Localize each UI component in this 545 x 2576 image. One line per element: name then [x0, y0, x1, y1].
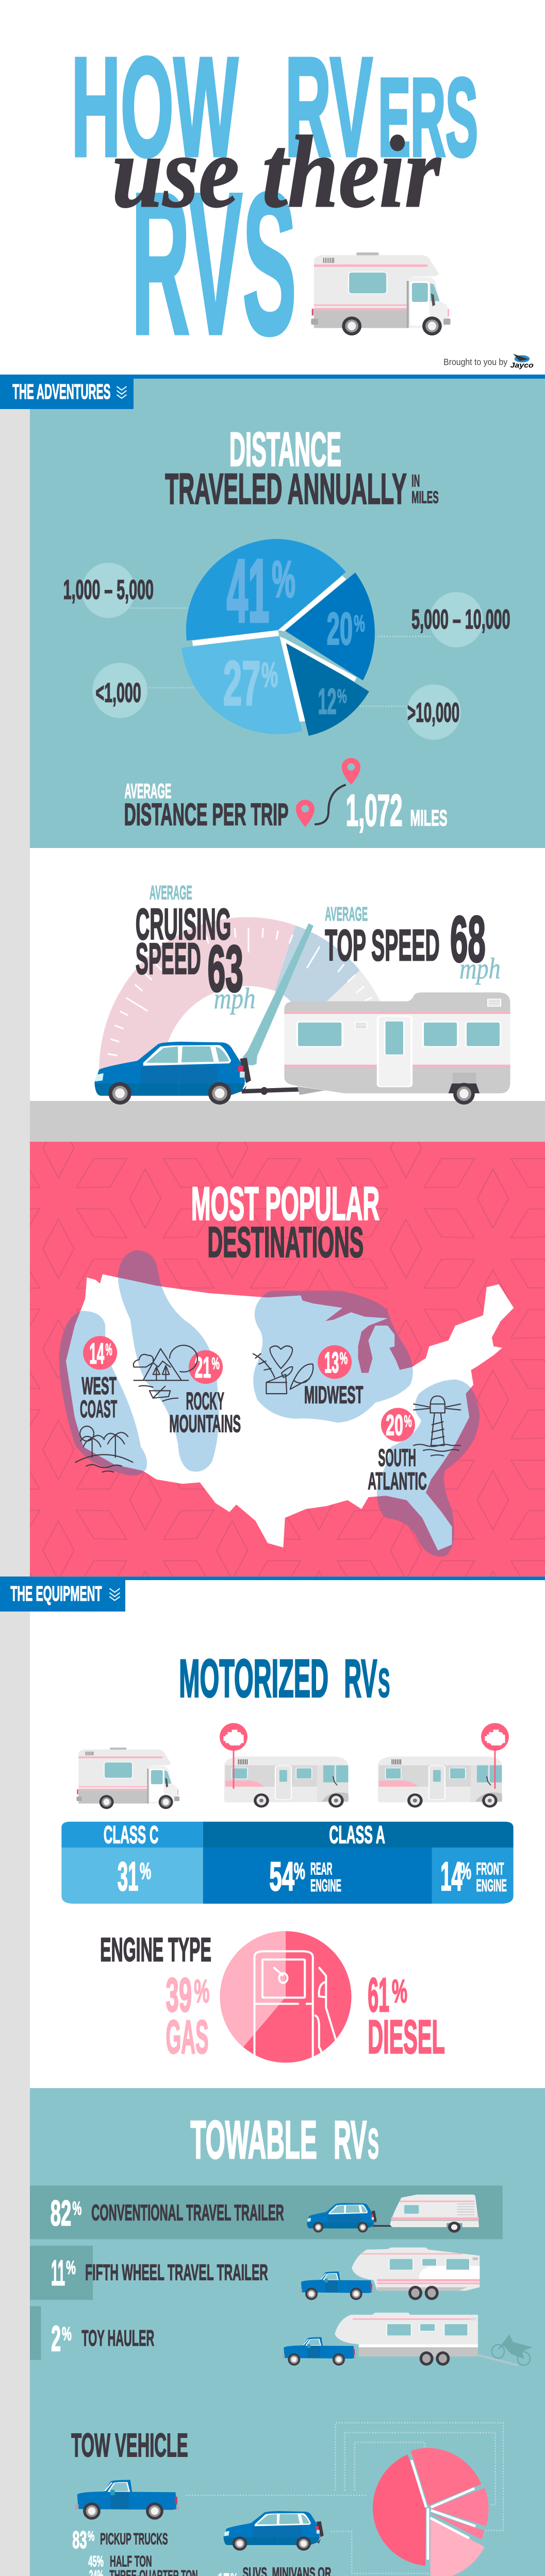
- panel: destinations: MIDWEST: [304, 1381, 364, 1409]
- region: south atlantic: SOUTH: [378, 1445, 416, 1472]
- region: rocky mountains: [134, 1345, 241, 1438]
- panel: speed: SPEED: [136, 934, 201, 983]
- stat: average distance per trip: AVERAGE: [124, 779, 171, 803]
- panel: speed: [94, 882, 510, 1105]
- pie chart: distance: %: [354, 610, 365, 636]
- section tab: adventures: [0, 375, 134, 409]
- panel: speed: mph: [214, 982, 255, 1014]
- pie chart: distance: 12: [318, 681, 337, 722]
- text: top speed: AVERAGE: [325, 903, 368, 925]
- bar row: conventional travel trailer: 82: [51, 2193, 71, 2233]
- pie chart: tow vehicle: [373, 2448, 489, 2576]
- pie chart: distance: %: [261, 655, 278, 694]
- panel: motorized rvs: THE EQUIPMENT: [10, 1582, 102, 1605]
- panel: engine type: %: [194, 1973, 209, 2009]
- icon: travel trailer: [242, 992, 510, 1105]
- region: west coast: 14: [89, 1337, 104, 1370]
- heading: distance traveled annually: DISTANCE: [229, 423, 341, 476]
- bar row: toy hauler: [30, 2306, 532, 2366]
- panel: title header: [12, 28, 534, 403]
- region: midwest: %: [340, 1349, 348, 1368]
- icon: suv: [224, 2511, 324, 2551]
- bar row: conventional travel trailer: [30, 2185, 503, 2239]
- panel: speed: 63: [207, 932, 243, 1005]
- panel: towable rvs: RV: [334, 2110, 367, 2170]
- panel: speed: CRUISING: [136, 900, 231, 948]
- table: motorized share: 14: [440, 1854, 463, 1899]
- bar row: toy hauler: 2: [51, 2318, 61, 2359]
- panel: destinations: MOUNTAINS: [169, 1411, 241, 1438]
- stat: gas: [166, 1969, 209, 2063]
- icon: class c rv: [76, 1748, 179, 1809]
- map: united states with regions: [52, 1250, 521, 1557]
- panel: tow vehicle: PICKUP TRUCKS: [100, 2530, 168, 2548]
- region: south atlantic: [368, 1396, 460, 1495]
- stat: diesel: 61: [368, 1969, 389, 2022]
- pie labels: [63, 574, 510, 727]
- panel: destinations: [30, 1142, 545, 1577]
- table: motorized share: CLASS C: [104, 1821, 158, 1849]
- section label: the adventures: [12, 380, 126, 403]
- stat: average distance per trip: 1,072: [346, 786, 403, 835]
- credit: brought to you by jayco: Brought to you by: [443, 357, 507, 367]
- region: rocky mountains: ROCKY: [186, 1387, 224, 1415]
- pie chart: distance: %: [272, 550, 295, 608]
- region: south atlantic: 20: [386, 1409, 403, 1442]
- panel: engine type: GAS: [166, 2010, 208, 2063]
- stat: diesel: [368, 1969, 445, 2063]
- text: top speed: [325, 903, 501, 985]
- table: motorized share: CLASS A: [329, 1821, 385, 1849]
- pie labels: <1,000: [95, 677, 141, 708]
- heading: most popular destinations: [191, 1177, 379, 1266]
- stats: pickup trucks: 83: [72, 2526, 87, 2553]
- stats: pickup trucks: %: [88, 2529, 94, 2544]
- panel: distance traveled: MILES: [411, 487, 439, 506]
- bar row: fifth wheel travel trailer: %: [66, 2257, 76, 2278]
- title: how rvers: HOW: [71, 28, 239, 186]
- table: motorized share: 31: [118, 1854, 138, 1899]
- bar row: conventional travel trailer: %: [72, 2198, 81, 2219]
- panel: distance traveled: MILES: [410, 805, 448, 831]
- pie chart: distance: 27: [223, 648, 261, 718]
- pink patterned background: [30, 1142, 545, 1577]
- panel: engine type: 39: [166, 1969, 192, 2022]
- stats: suvs and cars: [217, 2564, 376, 2576]
- icon: class c motorhome: [311, 252, 451, 335]
- icon: pickup truck: [75, 2480, 179, 2520]
- panel: towable rvs: [30, 2110, 532, 2366]
- title: how rvers: [71, 28, 478, 376]
- heading: towable rvs: [190, 2110, 379, 2170]
- table: motorized share: ENGINE: [310, 1876, 341, 1895]
- stat: average distance per trip: [124, 758, 448, 835]
- region: south atlantic: %: [404, 1412, 412, 1431]
- heading: motorized rvs: [179, 1648, 390, 1708]
- section label: the equipment: [10, 1582, 120, 1605]
- table: motorized share: %: [294, 1858, 305, 1884]
- icon: class a front engine: [378, 1723, 509, 1807]
- panel: towable rvs: S: [368, 2120, 379, 2167]
- stats: pickup trucks: HALF TON: [110, 2553, 152, 2570]
- title: how rvers: RV: [285, 28, 373, 186]
- icon: class a rear engine: [220, 1723, 349, 1807]
- pie chart: distance: 41: [227, 541, 269, 641]
- region: west coast: WEST: [81, 1372, 117, 1400]
- panel: title header: THE ADVENTURES: [12, 380, 110, 403]
- panel: motorized rvs: [10, 1582, 514, 1904]
- region: midwest: 13: [324, 1346, 339, 1379]
- label bubbles: [81, 563, 483, 740]
- sidebar strip: [0, 409, 30, 2576]
- icon: blue suv: [94, 1042, 251, 1105]
- panel: motorized rvs: RV: [344, 1648, 377, 1708]
- bar row: toy hauler: TOY HAULER: [81, 2326, 154, 2350]
- stat: average distance per trip: DISTANCE PER TRIP: [124, 798, 289, 832]
- credit: brought to you by jayco: [443, 353, 534, 369]
- section bar: equipment: [0, 1577, 545, 1580]
- panel background: towable teal: [30, 2088, 545, 2576]
- region: midwest: [253, 1345, 364, 1409]
- pie chart: distance: 20: [327, 603, 353, 654]
- road band: [30, 1101, 545, 1142]
- table: motorized share: %: [460, 1858, 471, 1884]
- bar row: toy hauler: %: [62, 2323, 72, 2345]
- table: motorized share: 54: [269, 1854, 294, 1899]
- region: west coast: %: [105, 1341, 112, 1359]
- heading: distance traveled annually: IN: [411, 471, 420, 490]
- region: rocky mountains: %: [212, 1354, 220, 1373]
- region: south atlantic: ATLANTIC: [368, 1468, 427, 1495]
- credit: brought to you by jayco: Jayco: [510, 362, 534, 369]
- chart: fuel pump pie: [220, 1931, 352, 2063]
- section tab: equipment: [0, 1577, 125, 1612]
- panel: engine type: ENGINE TYPE: [100, 1931, 211, 1969]
- text: cruising speed: [136, 882, 255, 1014]
- stats: pickup trucks: [72, 2526, 198, 2576]
- panel: motorized rvs: S: [378, 1660, 390, 1705]
- panel: tow vehicle: [71, 2423, 503, 2576]
- table: motorized share: %: [140, 1858, 151, 1884]
- pie chart: distance: %: [337, 685, 347, 707]
- stat: diesel: %: [392, 1973, 407, 2009]
- region: rocky mountains: 21: [195, 1351, 211, 1384]
- panel background: adventures teal: [30, 379, 545, 848]
- panel: engine type: [100, 1931, 445, 2063]
- bar row: fifth wheel travel trailer: 11: [51, 2252, 65, 2293]
- table: motorized share: [61, 1821, 514, 1904]
- region: west coast: COAST: [80, 1396, 117, 1423]
- pie labels: >10,000: [407, 697, 459, 727]
- icon: dirt bike: [492, 2335, 532, 2365]
- region: west coast: [75, 1336, 133, 1472]
- pie labels: 1,000 – 5,000: [63, 574, 154, 605]
- text: cruising speed: AVERAGE: [150, 882, 192, 904]
- chart: speedometer gauge: [99, 917, 386, 1070]
- panel: tow vehicle: TOW VEHICLE: [71, 2427, 188, 2464]
- section bar: adventures: [0, 375, 545, 379]
- panel: distance traveled: [63, 423, 510, 835]
- table: motorized share: REAR: [310, 1859, 332, 1878]
- bar row: fifth wheel travel trailer: [30, 2246, 480, 2300]
- stats: pickup trucks: 45%: [88, 2553, 104, 2570]
- heading: distance traveled annually: [165, 423, 439, 513]
- pie chart: distance: [181, 539, 375, 736]
